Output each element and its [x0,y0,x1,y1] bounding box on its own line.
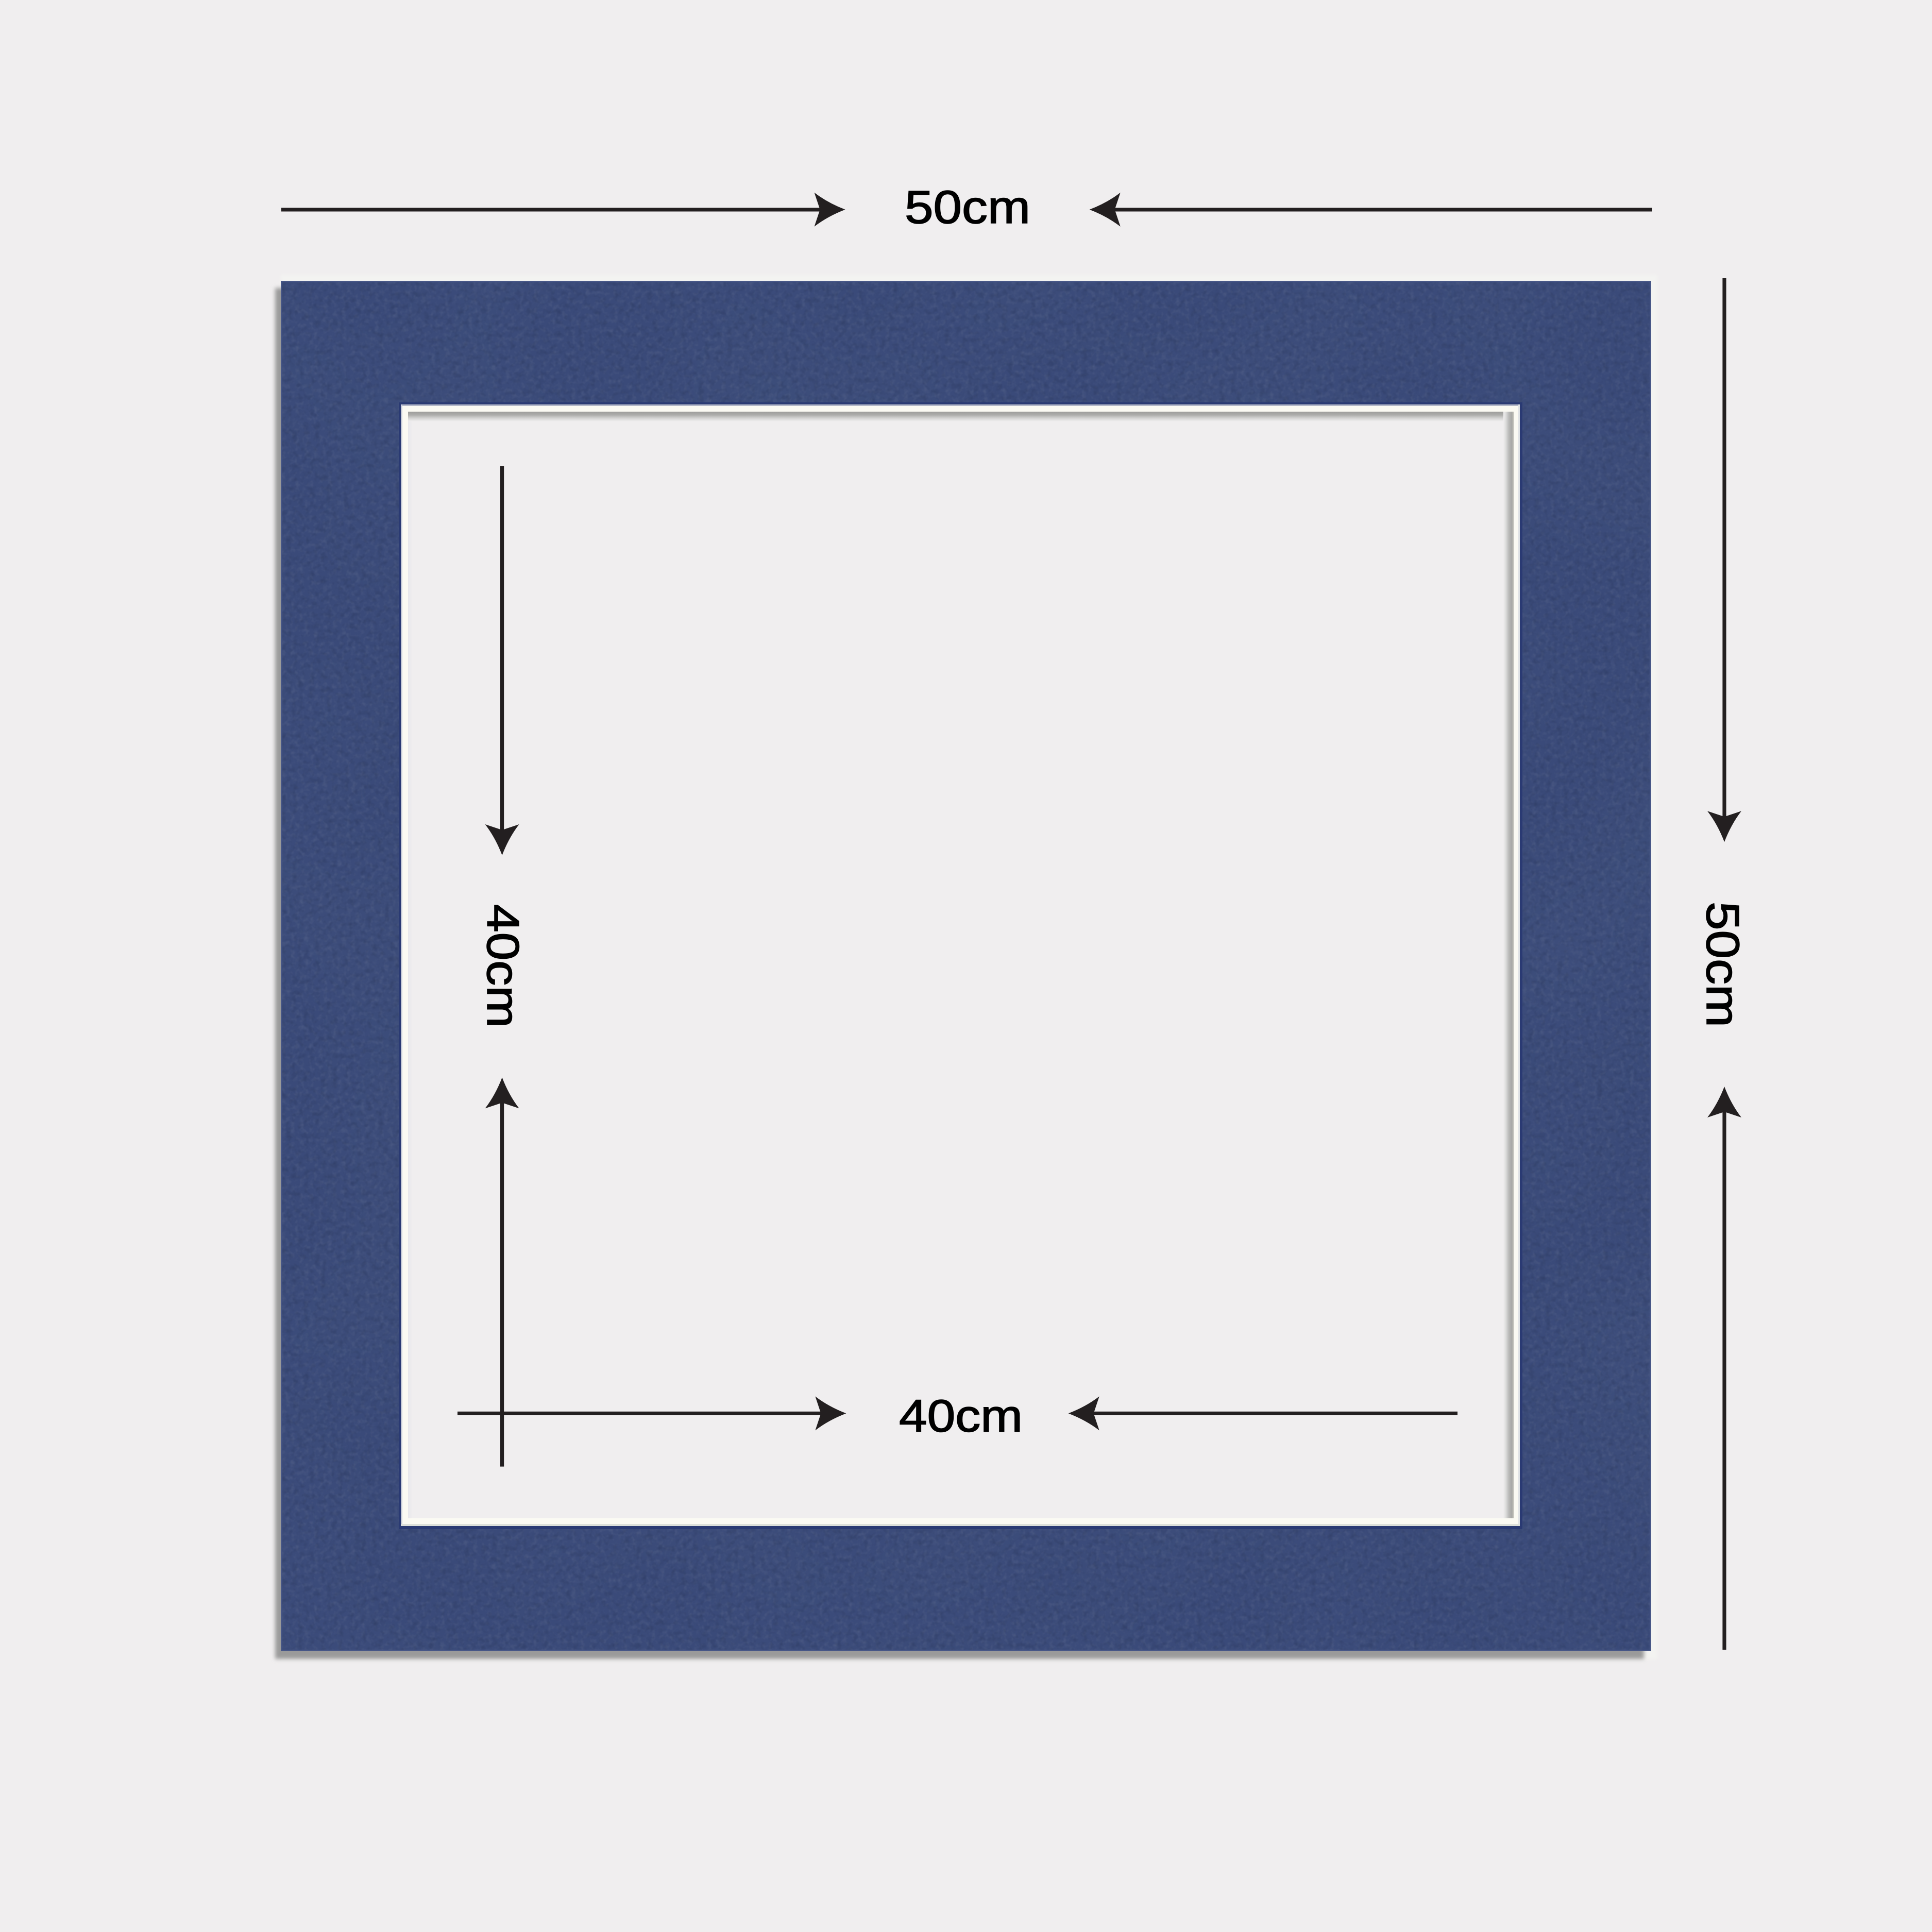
arrow: right pointing left [1090,193,1652,227]
dimension: outer width 50cm [281,182,1652,233]
dimension: outer height 50cm [1697,278,1748,1650]
dimension: aperture height 40cm [478,466,529,1467]
label: 40cm: 40cm [899,1390,1023,1442]
board edge highlight [281,275,1657,1659]
arrow: right pointing left [1069,1396,1458,1430]
board surface [281,281,1651,1651]
label: 50cm rotated: 50cm [1697,902,1748,1027]
dimension: aperture width 40cm [457,1390,1458,1442]
board drop shadow [275,288,1644,1659]
arrow: bottom pointing up [485,1077,519,1467]
arrow: top pointing down [485,466,519,855]
panel: blue mount board with square aperture [275,275,1657,1659]
arrow: top pointing down [1707,278,1741,842]
aperture: bevel and opening [399,402,1522,1529]
label: 50cm: 50cm [905,182,1030,233]
arrow: bottom pointing up [1707,1087,1741,1650]
arrow: left pointing right [281,193,845,227]
label: 40cm rotated: 40cm [478,904,529,1028]
arrow: left pointing right [457,1396,846,1430]
